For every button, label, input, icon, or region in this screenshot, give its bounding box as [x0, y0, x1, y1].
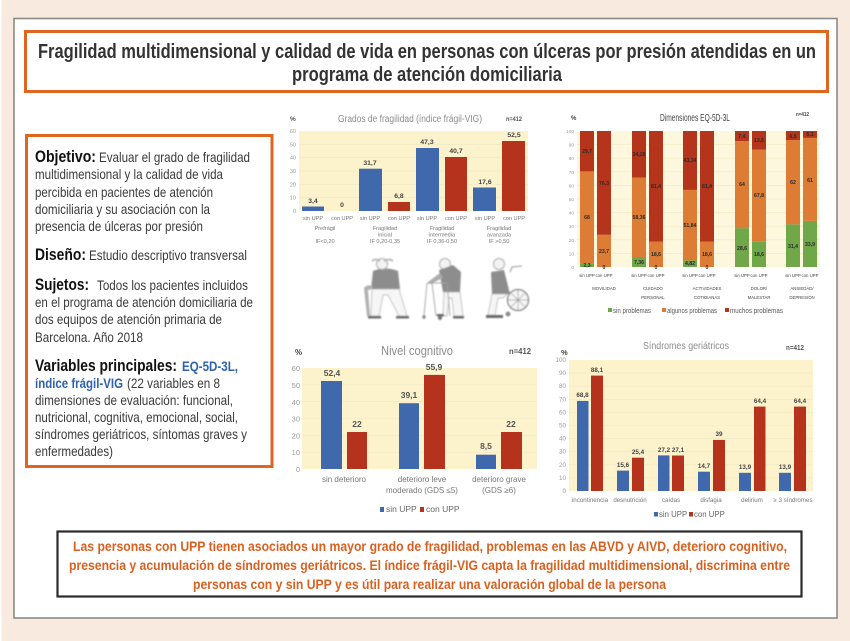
main variables text: índice frágil-VIG — [35, 375, 123, 391]
chart: síndromes geriátricos: % — [561, 348, 568, 357]
segment values: 0 — [655, 265, 658, 271]
chart: grados de fragilidad: % — [290, 116, 296, 123]
category axis labels: Fragilidad — [487, 226, 511, 232]
category axis labels — [572, 497, 813, 504]
category axis labels — [579, 273, 819, 300]
bar values: 22 — [506, 419, 516, 429]
segment values: 81,4 — [702, 184, 712, 190]
y axis ticks: 20 — [290, 182, 296, 188]
y axis ticks — [566, 129, 574, 271]
plot background — [302, 368, 537, 469]
category axis labels: sin UPP — [682, 273, 698, 278]
bar values: 39 — [715, 431, 723, 438]
chart: síndromes geriátricos — [555, 340, 813, 519]
bar values: 3,4 — [308, 198, 318, 205]
y axis ticks: 50 — [290, 142, 296, 148]
y axis ticks: 70 — [559, 396, 566, 403]
segment values: 31,4 — [788, 244, 798, 250]
y axis ticks: 10 — [569, 251, 574, 257]
y axis ticks: 70 — [569, 170, 574, 176]
category axis labels: sin deterioro — [322, 475, 367, 484]
category axis labels: con UPP — [331, 216, 353, 222]
bars: con UPP — [591, 376, 806, 491]
category axis labels: ≥ 3 síndromes — [773, 497, 813, 504]
chart: dimensiones EQ-5D-3L: n=412 — [796, 112, 809, 118]
category axis labels: IF >0,50 — [489, 239, 509, 245]
conclusion text — [69, 538, 790, 592]
y axis ticks: 60 — [292, 364, 300, 373]
category axis labels: disfagia — [700, 497, 722, 504]
bar values: 13,9 — [739, 464, 752, 471]
bar values: 64,4 — [754, 398, 767, 405]
category axis labels: DOLOR/ — [751, 286, 768, 291]
category axis labels: sin UPP — [631, 273, 647, 278]
category axis labels: deterioro grave — [472, 475, 526, 484]
y axis ticks: 20 — [569, 238, 574, 244]
segment values: 43,34 — [684, 158, 697, 164]
bar values: 31,7 — [363, 160, 377, 167]
bars: sin problemas — [580, 221, 817, 267]
chart: nivel cognitivo — [292, 343, 537, 514]
category axis labels: sin UPP — [360, 216, 380, 222]
bar values: 17,6 — [478, 179, 492, 186]
segment values: 7,36 — [634, 260, 644, 266]
category axis labels: con UPP — [388, 216, 410, 222]
y axis ticks — [292, 364, 300, 474]
subjects text: Sujetos: — [35, 275, 89, 294]
y axis ticks: 40 — [292, 398, 300, 407]
segment values: 2,3 — [583, 263, 591, 269]
legend: sin problemas — [613, 306, 651, 315]
category axis labels: IF 0,20-0,35 — [370, 239, 400, 245]
chart: grados de fragilidad: n=412 — [506, 116, 522, 123]
objective text: Evaluar el grado de fragilidad — [99, 149, 250, 165]
y axis ticks: 30 — [292, 414, 300, 424]
objective text: Objetivo: — [35, 147, 96, 166]
category axis labels: Fragilidad — [430, 226, 454, 232]
bar values: 13,9 — [779, 464, 792, 471]
segment values: 33,9 — [805, 242, 815, 248]
y axis ticks: 60 — [569, 183, 574, 189]
category axis labels: con UPP — [802, 273, 819, 278]
category axis labels: sin UPP — [303, 216, 323, 222]
category axis labels: avanzada — [487, 232, 512, 238]
y axis ticks: 80 — [569, 156, 574, 162]
bar values: 8,5 — [480, 441, 492, 451]
category axis labels: IF<0,20 — [315, 239, 335, 245]
main variables text: enfermedades) — [35, 443, 113, 459]
segment values: 61 — [807, 178, 813, 184]
y axis ticks — [290, 129, 296, 215]
category axis labels: ACTIVIDADES — [693, 286, 721, 291]
y axis ticks: 30 — [569, 224, 574, 230]
segment values: 76,3 — [599, 181, 609, 187]
category axis labels: CUIDADO — [643, 286, 664, 291]
bar values — [324, 362, 516, 451]
segment values: 68 — [584, 215, 590, 221]
category axis labels: COTIDIANAS — [694, 295, 720, 300]
y axis ticks: 0 — [293, 209, 296, 215]
title text: programa de atención domiciliaria — [292, 64, 563, 86]
segment values: 34,28 — [633, 152, 646, 158]
legend: con UPP — [426, 504, 460, 514]
chart: síndromes geriátricos: n=412 — [786, 345, 804, 352]
bars: con UPP — [388, 141, 525, 211]
legend: con UPP — [694, 510, 725, 519]
segment values: 6,5 — [789, 134, 797, 140]
y axis ticks: 20 — [559, 462, 566, 469]
category axis labels: intermedia — [429, 232, 456, 238]
bars: algunos problemas — [580, 138, 817, 267]
legend: algunos problemas — [667, 306, 717, 315]
bars: sin UPP — [302, 148, 496, 211]
segment values: 13,6 — [754, 138, 764, 144]
bar values — [308, 132, 521, 209]
title text — [38, 41, 816, 86]
bar values: 40,7 — [449, 148, 463, 155]
y axis ticks — [555, 357, 566, 495]
chart: nivel cognitivo: n=412 — [509, 347, 532, 356]
category axis labels: desnutrición — [613, 497, 647, 504]
segment values: 18,6 — [651, 252, 661, 258]
bar values: 88,1 — [591, 367, 604, 374]
chart: dimensiones EQ-5D-3L: % — [571, 116, 577, 122]
segment values: 4,82 — [685, 261, 695, 267]
segment values: 0 — [603, 265, 606, 271]
main variables text — [35, 356, 247, 459]
segment values: 7,4 — [738, 134, 746, 140]
conclusion box — [58, 532, 802, 596]
category axis labels: Prefrágil — [315, 226, 335, 232]
category axis labels: delirium — [741, 497, 763, 504]
legend — [380, 504, 460, 514]
category axis labels: MOVILIDAD — [592, 286, 616, 291]
bars: muchos problemas — [580, 131, 817, 242]
category axis labels: sin UPP — [785, 273, 801, 278]
chart title: Dimensiones EQ-5D-3L — [660, 113, 730, 124]
subjects text — [35, 275, 253, 345]
bar values: 52,4 — [324, 368, 341, 378]
legend: muchos problemas — [730, 306, 783, 315]
bar values: 55,9 — [426, 362, 443, 372]
main variables text: Variables principales: — [35, 356, 177, 375]
category axis labels: Fragilidad — [373, 226, 397, 232]
chart title: Síndromes geriátricos — [643, 340, 729, 352]
segment values: 62 — [790, 180, 796, 186]
bar values: 64,4 — [794, 398, 807, 405]
subjects text: en el programa de atención domiciliaria de — [35, 294, 253, 310]
category axis labels: inicial — [378, 232, 392, 238]
objective text: domiciliaria y su asociación con la — [35, 201, 210, 217]
conclusion text: personas con y sin UPP y es útil para realizar una valoración global de la persona — [193, 576, 666, 592]
plot background — [299, 131, 528, 211]
illustration: seated elder with cane — [364, 258, 409, 318]
design text: Diseño: — [35, 245, 86, 264]
category axis labels: con UPP — [648, 273, 665, 278]
y axis ticks: 30 — [559, 449, 566, 456]
segment values: 23,7 — [599, 249, 609, 255]
subjects text: dos equipos de atención primaria de — [35, 311, 222, 327]
y axis ticks: 100 — [555, 357, 566, 364]
bar values — [576, 367, 807, 471]
bars: sin UPP — [577, 401, 791, 491]
category axis labels: con UPP — [445, 216, 467, 222]
y axis ticks: 40 — [569, 211, 574, 217]
y axis ticks: 10 — [292, 448, 300, 457]
category axis labels: con UPP — [503, 216, 525, 222]
segment values: 81,4 — [651, 184, 661, 190]
y axis ticks: 50 — [559, 422, 566, 430]
category axis labels: con UPP — [596, 273, 613, 278]
illustration: elder with walker — [422, 258, 464, 320]
main variables text: (22 variables en 8 — [127, 375, 220, 391]
legend: sin UPP — [386, 504, 417, 514]
y axis ticks: 10 — [559, 475, 566, 482]
y axis ticks: 50 — [569, 197, 574, 203]
category axis labels — [322, 475, 526, 495]
bar values: 27,2 — [658, 447, 671, 454]
bar values: 15,6 — [617, 462, 630, 469]
objective text: percibida en pacientes de atención — [35, 184, 213, 200]
y axis ticks: 0 — [571, 265, 574, 271]
legend — [608, 306, 783, 315]
category axis labels: incontinencia — [572, 497, 609, 504]
title box — [26, 32, 828, 92]
category axis labels: sin UPP — [475, 216, 495, 222]
category axis labels: PERSONAL — [641, 295, 665, 300]
bar values: 22 — [352, 419, 362, 429]
y axis ticks: 0 — [296, 465, 300, 474]
bar values: 27,1 — [672, 447, 685, 454]
segment values: 18,6 — [754, 252, 764, 258]
segment values: 18,6 — [702, 252, 712, 258]
segment values: 0 — [706, 265, 709, 271]
chart: nivel cognitivo: % — [295, 348, 302, 357]
segment values: 5,1 — [806, 132, 814, 138]
y axis ticks: 90 — [559, 370, 566, 377]
category axis labels: sin UPP — [417, 216, 437, 222]
chart title: Grados de fragilidad (índice frágil-VIG) — [338, 114, 482, 125]
y axis ticks: 0 — [562, 488, 566, 495]
bar values: 25,4 — [632, 449, 645, 456]
main variables text: síndromes geriátricos, síntomas graves y — [35, 426, 247, 442]
y axis ticks: 80 — [559, 383, 566, 390]
y axis ticks: 40 — [290, 156, 296, 162]
y axis ticks: 50 — [292, 381, 300, 390]
chart: grados de fragilidad — [290, 114, 528, 245]
category axis labels: DEPRESIÓN — [789, 295, 815, 300]
y axis ticks: 30 — [290, 169, 296, 175]
category axis labels — [303, 216, 525, 245]
y axis ticks: 100 — [566, 129, 574, 135]
y axis ticks: 60 — [559, 409, 566, 416]
main variables text: EQ-5D-3L, — [182, 358, 238, 374]
category axis labels: sin UPP — [579, 273, 595, 278]
design text — [35, 245, 247, 264]
bar values: 6,8 — [394, 193, 404, 200]
main variables text: nutricional, cognitiva, emocional, social, — [35, 409, 238, 425]
y axis ticks: 20 — [292, 432, 300, 440]
bars: sin UPP — [321, 381, 496, 469]
plot background — [569, 360, 813, 491]
category axis labels: ANSIEDAD/ — [790, 286, 814, 291]
category axis labels: IF 0,36-0,50 — [427, 239, 457, 245]
bar values: 47,3 — [420, 139, 434, 146]
legend: sin UPP — [659, 510, 687, 519]
subjects text: Barcelona. Año 2018 — [35, 329, 143, 345]
segment values: 64 — [739, 182, 745, 188]
y axis ticks: 90 — [569, 143, 574, 149]
category axis labels: (GDS ≥6) — [482, 486, 516, 495]
bar values: 39,1 — [401, 390, 418, 400]
objective text: multidimensional y la calidad de vida — [35, 166, 223, 182]
main variables text: dimensiones de evaluación: funcional, — [35, 392, 233, 408]
chart title: Nivel cognitivo — [381, 343, 453, 358]
legend — [654, 510, 725, 519]
y axis ticks: 10 — [290, 196, 296, 202]
panel: study summary — [26, 136, 272, 466]
category axis labels: MALESTAR — [748, 295, 770, 300]
design text: Estudio descriptivo transversal — [89, 247, 247, 263]
category axis labels: deterioro leve — [398, 475, 447, 484]
category axis labels: caídas — [662, 497, 680, 504]
y axis ticks: 60 — [290, 129, 296, 135]
illustration: elder in wheelchair — [486, 258, 528, 318]
objective text — [35, 147, 250, 234]
bar values: 68,8 — [576, 392, 589, 399]
category axis labels: con UPP — [699, 273, 716, 278]
category axis labels: con UPP — [751, 273, 768, 278]
segment values — [582, 132, 815, 271]
subjects text: Todos los pacientes incluidos — [97, 277, 248, 293]
bar values: 52,5 — [507, 132, 521, 139]
bar values: 0 — [340, 202, 344, 209]
segment values: 28,6 — [737, 246, 747, 252]
segment values: 51,84 — [684, 223, 697, 229]
segment values: 58,36 — [633, 215, 646, 221]
segment values: 29,7 — [582, 149, 592, 155]
category axis labels: sin UPP — [734, 273, 750, 278]
y axis ticks: 40 — [559, 436, 566, 443]
chart: dimensiones EQ-5D-3L — [566, 112, 820, 315]
segment values: 67,8 — [754, 193, 764, 199]
plot background — [577, 131, 820, 267]
bar values: 14,7 — [698, 463, 711, 470]
bars: con UPP — [347, 375, 522, 469]
category axis labels: moderado (GDS ≤5) — [386, 486, 458, 495]
objective text: presencia de úlceras por presión — [35, 218, 203, 234]
